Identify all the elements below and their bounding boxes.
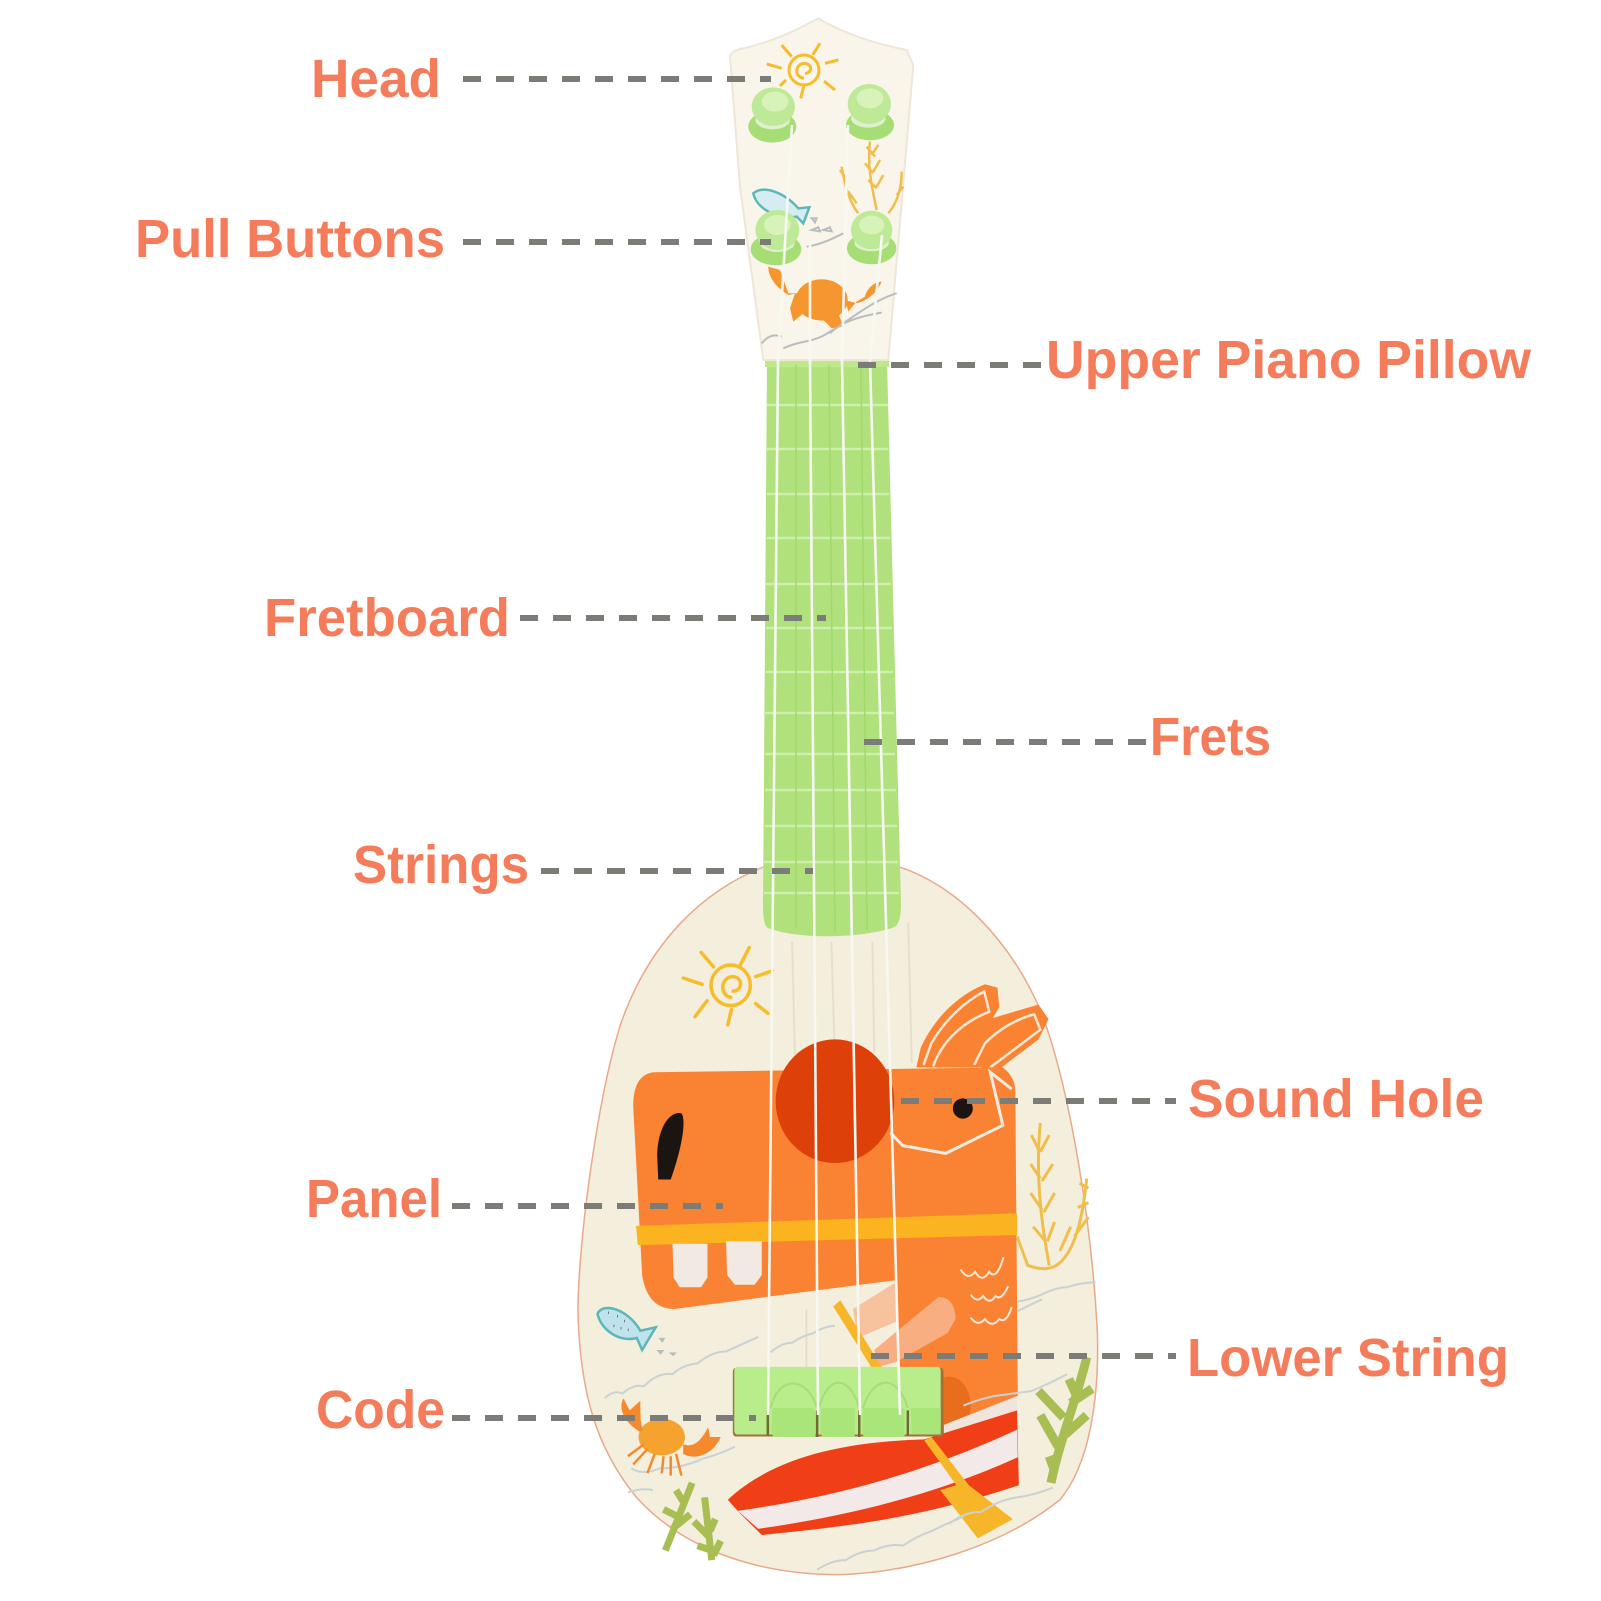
nut [765,358,889,367]
label: Head: Head [311,49,441,109]
peg bottom left [751,210,801,265]
donkey ears [916,984,1049,1073]
ear stitching [924,992,1040,1067]
bridge shadow on body [928,1377,971,1435]
wood folds under neck [792,922,912,1367]
head waves [762,218,897,348]
strings [768,125,900,1415]
paddle [833,1300,1013,1538]
label: Pull Buttons: Pull Buttons [135,209,445,269]
leader line: code [452,1415,756,1421]
yellow stripe [636,1213,1017,1245]
crab claws [768,267,882,328]
leader line: pull buttons [463,239,771,245]
leader line: panel [452,1203,723,1209]
label: Frets: Frets [1150,707,1271,767]
boat white rim [944,1396,1017,1439]
label: Fretboard: Fretboard [264,588,510,648]
neck shape [763,361,901,936]
bridge saddles [771,1408,941,1437]
leader line: head [463,76,771,82]
peg cap [755,210,799,250]
peg collar [755,111,790,129]
fur marks [961,1257,1012,1324]
body outline [578,867,1098,1575]
peg collar [851,109,886,128]
coral [1017,1123,1089,1269]
fish spots [608,1313,629,1330]
peg cap [851,211,892,249]
bridge block [734,1367,941,1435]
peg cap [848,84,891,124]
label: Sound Hole: Sound Hole [1188,1069,1484,1129]
peg top right [846,84,894,140]
peg bottom right [847,211,896,264]
peg cap [752,87,795,126]
peg shine [764,215,791,235]
peg base [847,232,896,264]
peg shine [857,88,883,108]
boat [728,1396,1019,1535]
muzzle outline [890,1072,1012,1153]
peg collar [854,234,889,251]
peg collar [760,235,795,252]
bridge [733,1367,944,1437]
leader line: lower string [871,1353,1176,1359]
leader line: strings [541,868,813,874]
label: Strings: Strings [353,835,529,895]
seaweed left [664,1483,721,1560]
peg shine [762,92,788,112]
fish bubbles [656,1338,677,1356]
head coral [840,142,903,213]
crab [621,1398,721,1476]
fret lines [764,405,899,893]
donkey body [633,1067,1018,1435]
sun [683,948,772,1025]
crab claws and legs [621,1398,721,1457]
leader line: sound hole [901,1098,1176,1104]
eye [953,1098,973,1119]
fretboard neck [763,358,901,936]
nostril [657,1113,684,1179]
headstock [730,18,913,360]
peg base [846,110,894,140]
seaweed right [1039,1357,1092,1483]
sound hole [776,1039,894,1163]
bridge arcs [771,1383,908,1408]
leader line: frets [864,739,1150,745]
label: Upper Piano Pillow: Upper Piano Pillow [1046,330,1532,390]
head outline [730,18,913,360]
bridge notches [768,1410,908,1437]
crab shell [796,279,848,321]
bridge shadow [733,1368,944,1436]
boat white stripe [738,1430,1018,1529]
head fish [753,190,809,223]
guitar body [578,867,1098,1575]
head crab [768,267,882,328]
boat hull [728,1410,1019,1535]
peg top left [748,87,796,143]
crab shell [639,1419,685,1455]
peg base [748,111,796,143]
peg base [751,233,801,265]
leader line: fretboard [520,615,826,621]
head sun [767,43,838,98]
teeth [672,1241,762,1287]
pale arm [853,1282,897,1338]
leader line: upper piano pillow [858,362,1046,368]
peg shine [859,216,884,234]
label: Panel: Panel [306,1169,442,1229]
fret grooves [796,365,867,933]
label: Lower String: Lower String [1187,1328,1509,1388]
fish [597,1308,677,1356]
label: Code: Code [316,1380,445,1440]
fish body [597,1308,656,1350]
waves [605,1282,1096,1570]
